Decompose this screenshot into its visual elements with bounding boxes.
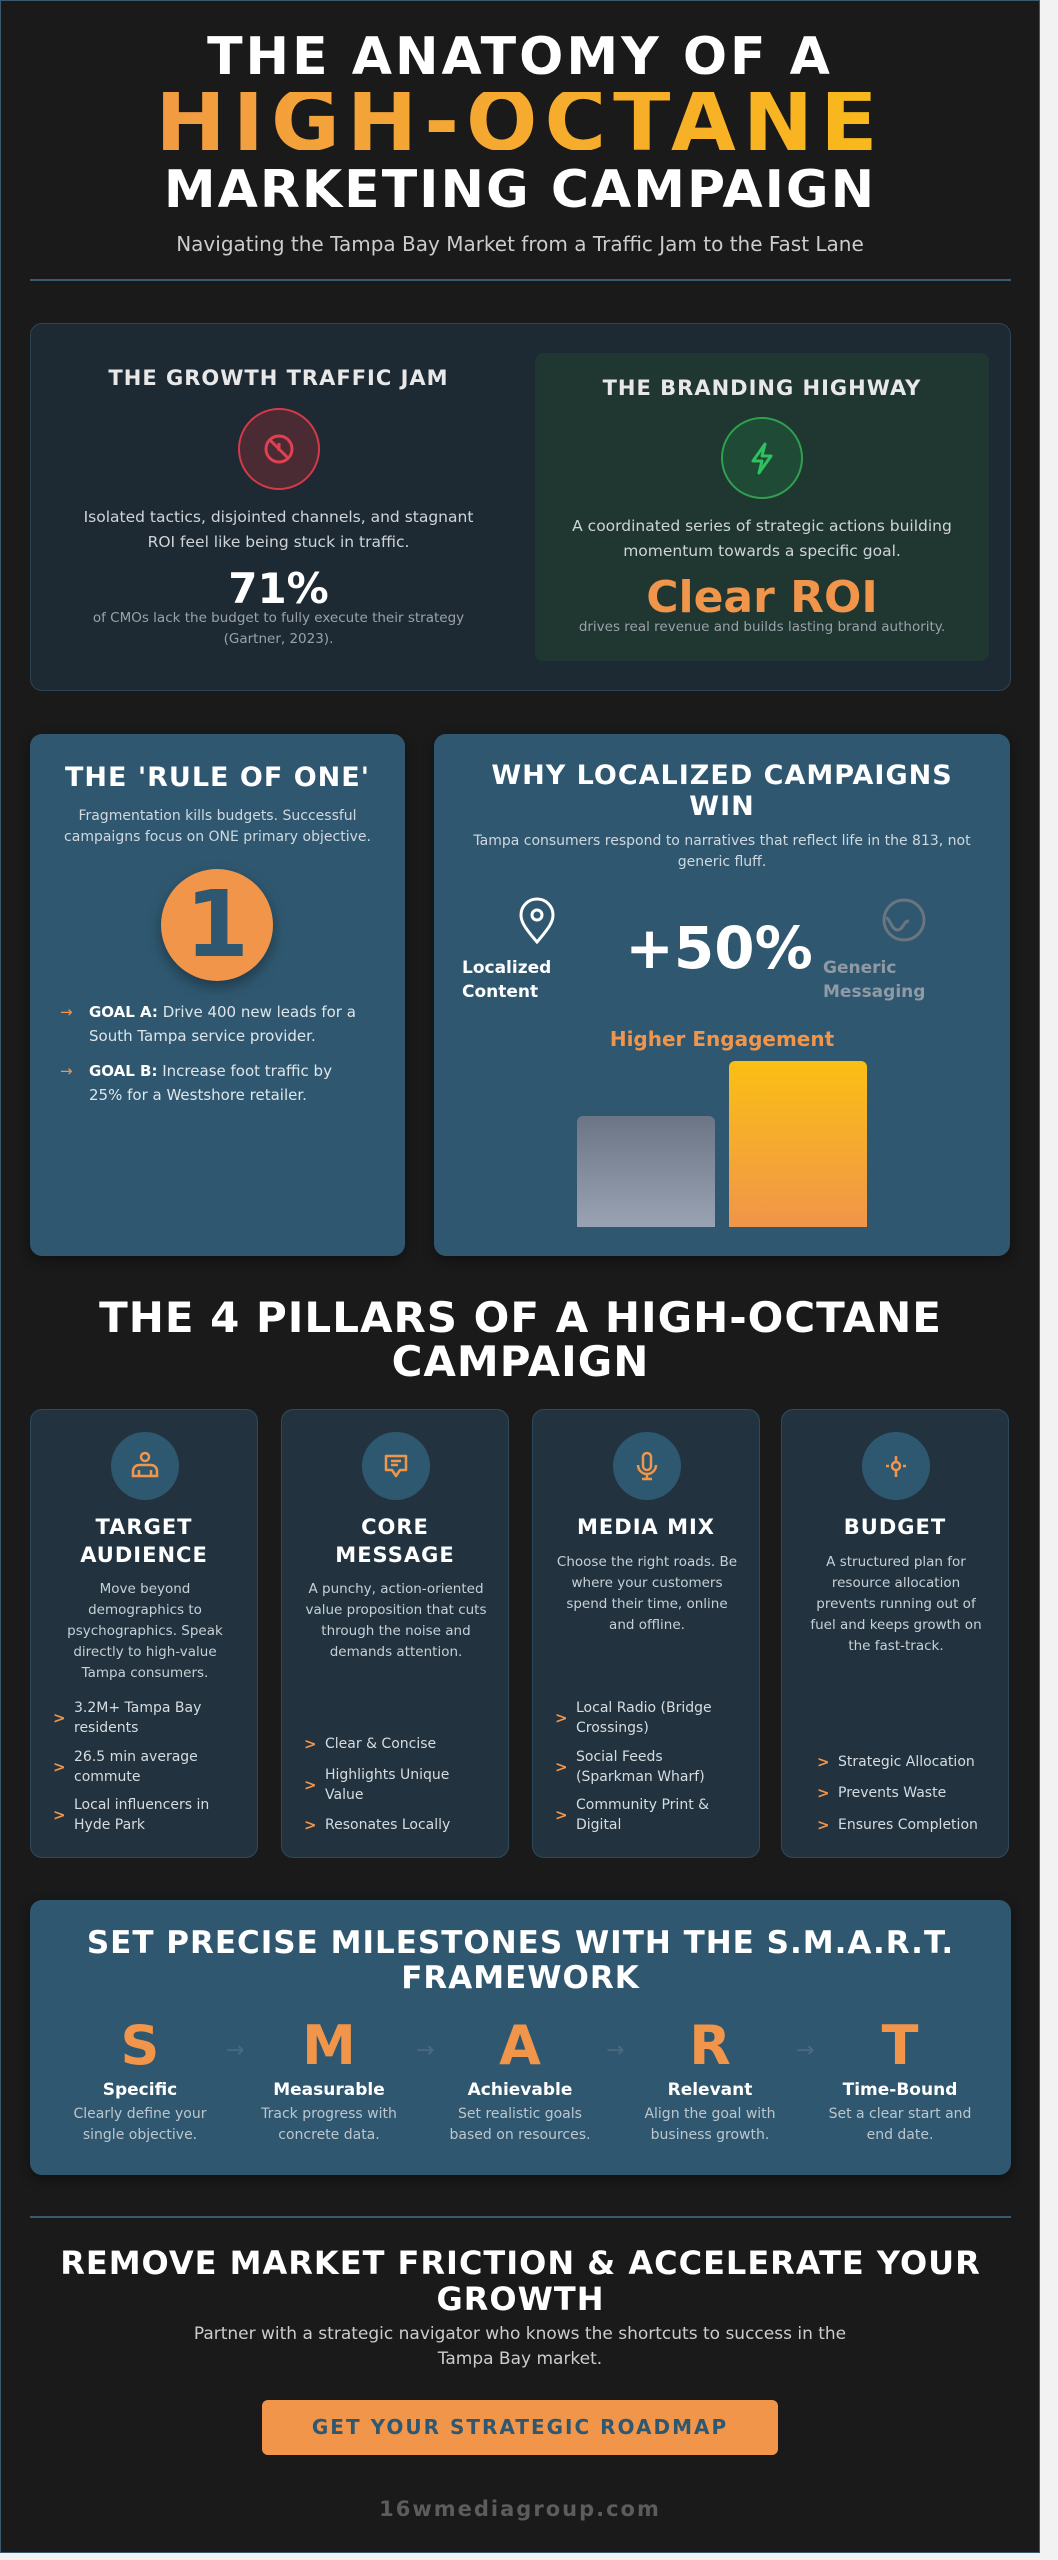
goals list: GOAL B: Increase foot traffic by 25% for a Westshore retailer. xyxy=(89,1062,332,1104)
goals list xyxy=(60,1003,356,1104)
heading: growth traffic jam: THE GROWTH TRAFFIC JAM xyxy=(108,366,449,390)
SMART steps: R xyxy=(689,2014,731,2077)
panel: branding highway: drives real revenue and builds lasting brand authority. xyxy=(579,619,945,635)
panel: localized campaigns: Generic xyxy=(823,958,896,978)
SMART steps: → xyxy=(226,2038,244,2063)
text: partner: Partner with a strategic navigator who knows the shortcuts to success in the Tampa Bay market. xyxy=(194,2324,846,2369)
panel: localized campaigns: WHY LOCALIZED CAMPAIGNS WIN xyxy=(491,760,953,822)
goals list: → xyxy=(60,1003,73,1021)
bar chart xyxy=(577,1061,867,1227)
panel: localized campaigns: Messaging xyxy=(823,982,925,1002)
icon: message xyxy=(362,1432,430,1500)
card: core message: CORE xyxy=(361,1515,429,1539)
panel: localized campaigns: Content xyxy=(462,982,538,1002)
panel: SMART framework xyxy=(30,1900,1011,2175)
goals list: → xyxy=(60,1062,73,1080)
SMART steps: Achievable xyxy=(468,2080,572,2100)
SMART steps: Align the goal with business growth. xyxy=(644,2106,776,2143)
panel: branding highway: THE BRANDING HIGHWAY xyxy=(603,376,921,400)
panel: localized campaigns: Tampa consumers respond to narratives that reflect life in the 813, not generic fluff. xyxy=(473,833,971,870)
SMART steps: Specific xyxy=(103,2080,177,2100)
card: core message: A punchy, action-oriented value proposition that cuts through the noise and demands attention. xyxy=(305,1581,487,1660)
icon: audience xyxy=(111,1432,179,1500)
title: THE ANATOMY OF A xyxy=(207,27,833,87)
SMART steps: A xyxy=(499,2014,541,2077)
text: traffic jam description: Isolated tactics, disjointed channels, and stagnant ROI feel like being stuck in traffic. xyxy=(84,508,473,551)
subtitle: Navigating the Tampa Bay Market from a Traffic Jam to the Fast Lane xyxy=(176,232,864,256)
SMART steps: Measurable xyxy=(273,2080,385,2100)
card: target audience: 3.2M+ Tampa Bay residents xyxy=(74,1700,201,1736)
SMART steps: S xyxy=(121,2014,159,2077)
card: media mix: Social Feeds (Sparkman Wharf) xyxy=(576,1749,705,1785)
card: budget: BUDGET xyxy=(844,1515,946,1539)
panel: localized campaigns: Localized xyxy=(462,958,551,978)
goals list: GOAL A: Drive 400 new leads for a South Tampa service provider. xyxy=(89,1003,356,1045)
icon: microphone xyxy=(613,1432,681,1500)
card: media mix: MEDIA MIX xyxy=(577,1515,715,1539)
icon: budget xyxy=(862,1432,930,1500)
card: media mix xyxy=(532,1409,760,1858)
card: media mix: Choose the right roads. Be where your customers spend their time, online and offline. xyxy=(557,1554,737,1633)
button xyxy=(262,2400,778,2455)
heading: call to action: REMOVE MARKET FRICTION & ACCELERATE YOUR GROWTH xyxy=(60,2244,981,2318)
card: media mix: Community Print & Digital xyxy=(576,1797,709,1833)
card: core message: Highlights Unique Value xyxy=(325,1767,449,1803)
SMART steps: Set a clear start and end date. xyxy=(829,2106,971,2143)
card: budget: Prevents Waste xyxy=(838,1785,946,1801)
panel: localized campaigns xyxy=(434,734,1010,1256)
card: target audience: Local influencers in Hyde Park xyxy=(74,1797,209,1833)
stat: clear ROI: Clear ROI xyxy=(646,572,878,623)
panel: traffic jam vs highway xyxy=(30,323,1011,691)
card: budget: A structured plan for resource allocation prevents running out of fuel and keeps growth on the fast-track. xyxy=(810,1554,982,1654)
title: MARKETING CAMPAIGN xyxy=(164,160,876,220)
card: target audience: Move beyond demographics to psychographics. Speak directly to high-value Tampa consumers. xyxy=(67,1581,223,1681)
SMART steps: T xyxy=(882,2014,918,2077)
footer: 16wmediagroup.com xyxy=(379,2497,661,2521)
button: GET YOUR STRATEGIC ROADMAP xyxy=(312,2415,728,2439)
card: core message: Resonates Locally xyxy=(325,1817,450,1833)
panel: rule of one xyxy=(30,734,405,1256)
SMART steps: M xyxy=(302,2014,356,2077)
card: core message: MESSAGE xyxy=(335,1543,455,1567)
card: budget xyxy=(781,1409,1009,1858)
label: higher engagement: Higher Engagement xyxy=(610,1027,834,1051)
heading: 4 pillars: THE 4 PILLARS OF A HIGH-OCTANE CAMPAIGN xyxy=(99,1293,942,1386)
stat: +50%: +50% xyxy=(625,914,813,982)
title: HIGH-OCTANE xyxy=(155,72,885,170)
panel: rule of one: Fragmentation kills budgets. Successful campaigns focus on ONE primary objective. xyxy=(64,808,371,845)
SMART steps: Clearly define your single objective. xyxy=(74,2106,206,2143)
SMART steps: → xyxy=(796,2038,814,2063)
SMART steps: → xyxy=(606,2038,624,2063)
SMART steps: → xyxy=(416,2038,434,2063)
SMART steps: Track progress with concrete data. xyxy=(261,2106,397,2143)
heading: SMART: SET PRECISE MILESTONES WITH THE S.M.A.R.T. FRAMEWORK xyxy=(87,1925,954,1996)
panel: branding highway: A coordinated series of strategic actions building momentum towards a specific goal. xyxy=(572,517,952,560)
card: target audience: TARGET xyxy=(95,1515,193,1539)
panel: rule of one: THE 'RULE OF ONE' xyxy=(65,762,370,793)
card: media mix: Local Radio (Bridge Crossings) xyxy=(576,1700,712,1736)
card: target audience xyxy=(30,1409,258,1858)
text: stat caption: of CMOs lack the budget to fully execute their strategy (Gartner, 2023). xyxy=(93,610,464,647)
icon: blocked xyxy=(238,408,320,490)
icon: location pin xyxy=(520,898,554,944)
title xyxy=(155,27,885,220)
SMART steps: Relevant xyxy=(668,2080,752,2100)
icon: number one xyxy=(161,869,273,981)
icon: number one: 1 xyxy=(185,871,249,978)
card: core message xyxy=(281,1409,509,1858)
SMART steps: Set realistic goals based on resources. xyxy=(450,2106,590,2143)
card: budget: Ensures Completion xyxy=(838,1817,978,1833)
card: target audience: 26.5 min average commute xyxy=(74,1749,198,1785)
icon: generic xyxy=(882,898,926,942)
card: core message: Clear & Concise xyxy=(325,1736,436,1752)
card: budget: Strategic Allocation xyxy=(838,1754,975,1770)
stat: 71%: 71% xyxy=(228,564,329,613)
icon: lightning xyxy=(721,417,803,499)
panel: branding highway xyxy=(535,353,989,661)
card: target audience: AUDIENCE xyxy=(80,1543,208,1567)
SMART steps: Time-Bound xyxy=(843,2080,957,2100)
